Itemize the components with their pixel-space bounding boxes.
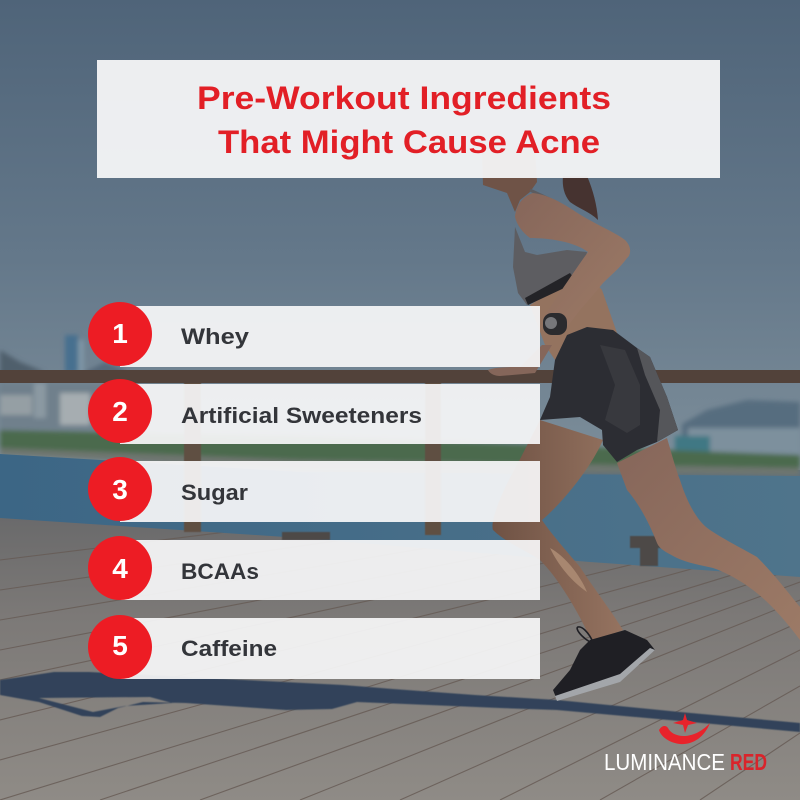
railing bar	[0, 370, 800, 383]
title: That Might Cause Acne	[218, 124, 600, 160]
list item 1: Whey: Whey	[181, 324, 250, 349]
logo: Luminance Red: RED	[730, 749, 767, 775]
hand	[488, 345, 552, 376]
list item 4: BCAAs: BCAAs	[181, 559, 259, 584]
head and neck	[482, 150, 537, 212]
list item 5: Caffeine: 5	[112, 630, 128, 661]
list item 4: BCAAs	[88, 536, 540, 600]
list item 5: Caffeine: Caffeine	[181, 636, 277, 661]
title: Pre-Workout Ingredients	[197, 80, 611, 116]
list item 1: Whey	[88, 302, 540, 367]
sports bra	[513, 227, 587, 305]
sky	[0, 0, 800, 470]
strap	[530, 190, 560, 204]
list item 2: Artificial Sweeteners	[88, 379, 540, 444]
list item 3: Sugar: Sugar	[181, 480, 248, 505]
bra band	[525, 273, 577, 305]
ponytail	[563, 176, 598, 220]
calf highlight	[550, 548, 587, 592]
list item 3: Sugar: 3	[112, 474, 128, 505]
distant city and hills	[0, 335, 800, 476]
shorts	[540, 327, 678, 462]
back leg	[617, 438, 800, 640]
logo icon: star and crescent	[659, 713, 710, 744]
shoe	[553, 627, 655, 701]
pier bollard and posts	[184, 380, 670, 566]
deck	[0, 518, 800, 800]
runner	[482, 150, 800, 701]
front leg	[492, 420, 623, 642]
runner shadow on deck	[0, 672, 800, 732]
arm	[515, 193, 630, 327]
deck plank lines	[0, 532, 800, 800]
logo: Luminance Red	[604, 713, 767, 775]
title	[197, 80, 611, 160]
midriff	[530, 270, 617, 360]
list item 1: Whey: 1	[112, 318, 128, 349]
list item 5: Caffeine	[88, 615, 540, 679]
title panel	[97, 60, 720, 178]
shorts highlight	[637, 348, 678, 442]
list item 2: Artificial Sweeteners: Artificial Sweeteners	[181, 403, 422, 428]
list item 2: Artificial Sweeteners: 2	[112, 396, 128, 427]
watch	[543, 313, 567, 335]
logo wordmark: LUMINANCE	[604, 749, 725, 775]
water	[0, 454, 800, 580]
list item 4: BCAAs: 4	[112, 553, 128, 584]
list item 3: Sugar	[88, 457, 540, 522]
